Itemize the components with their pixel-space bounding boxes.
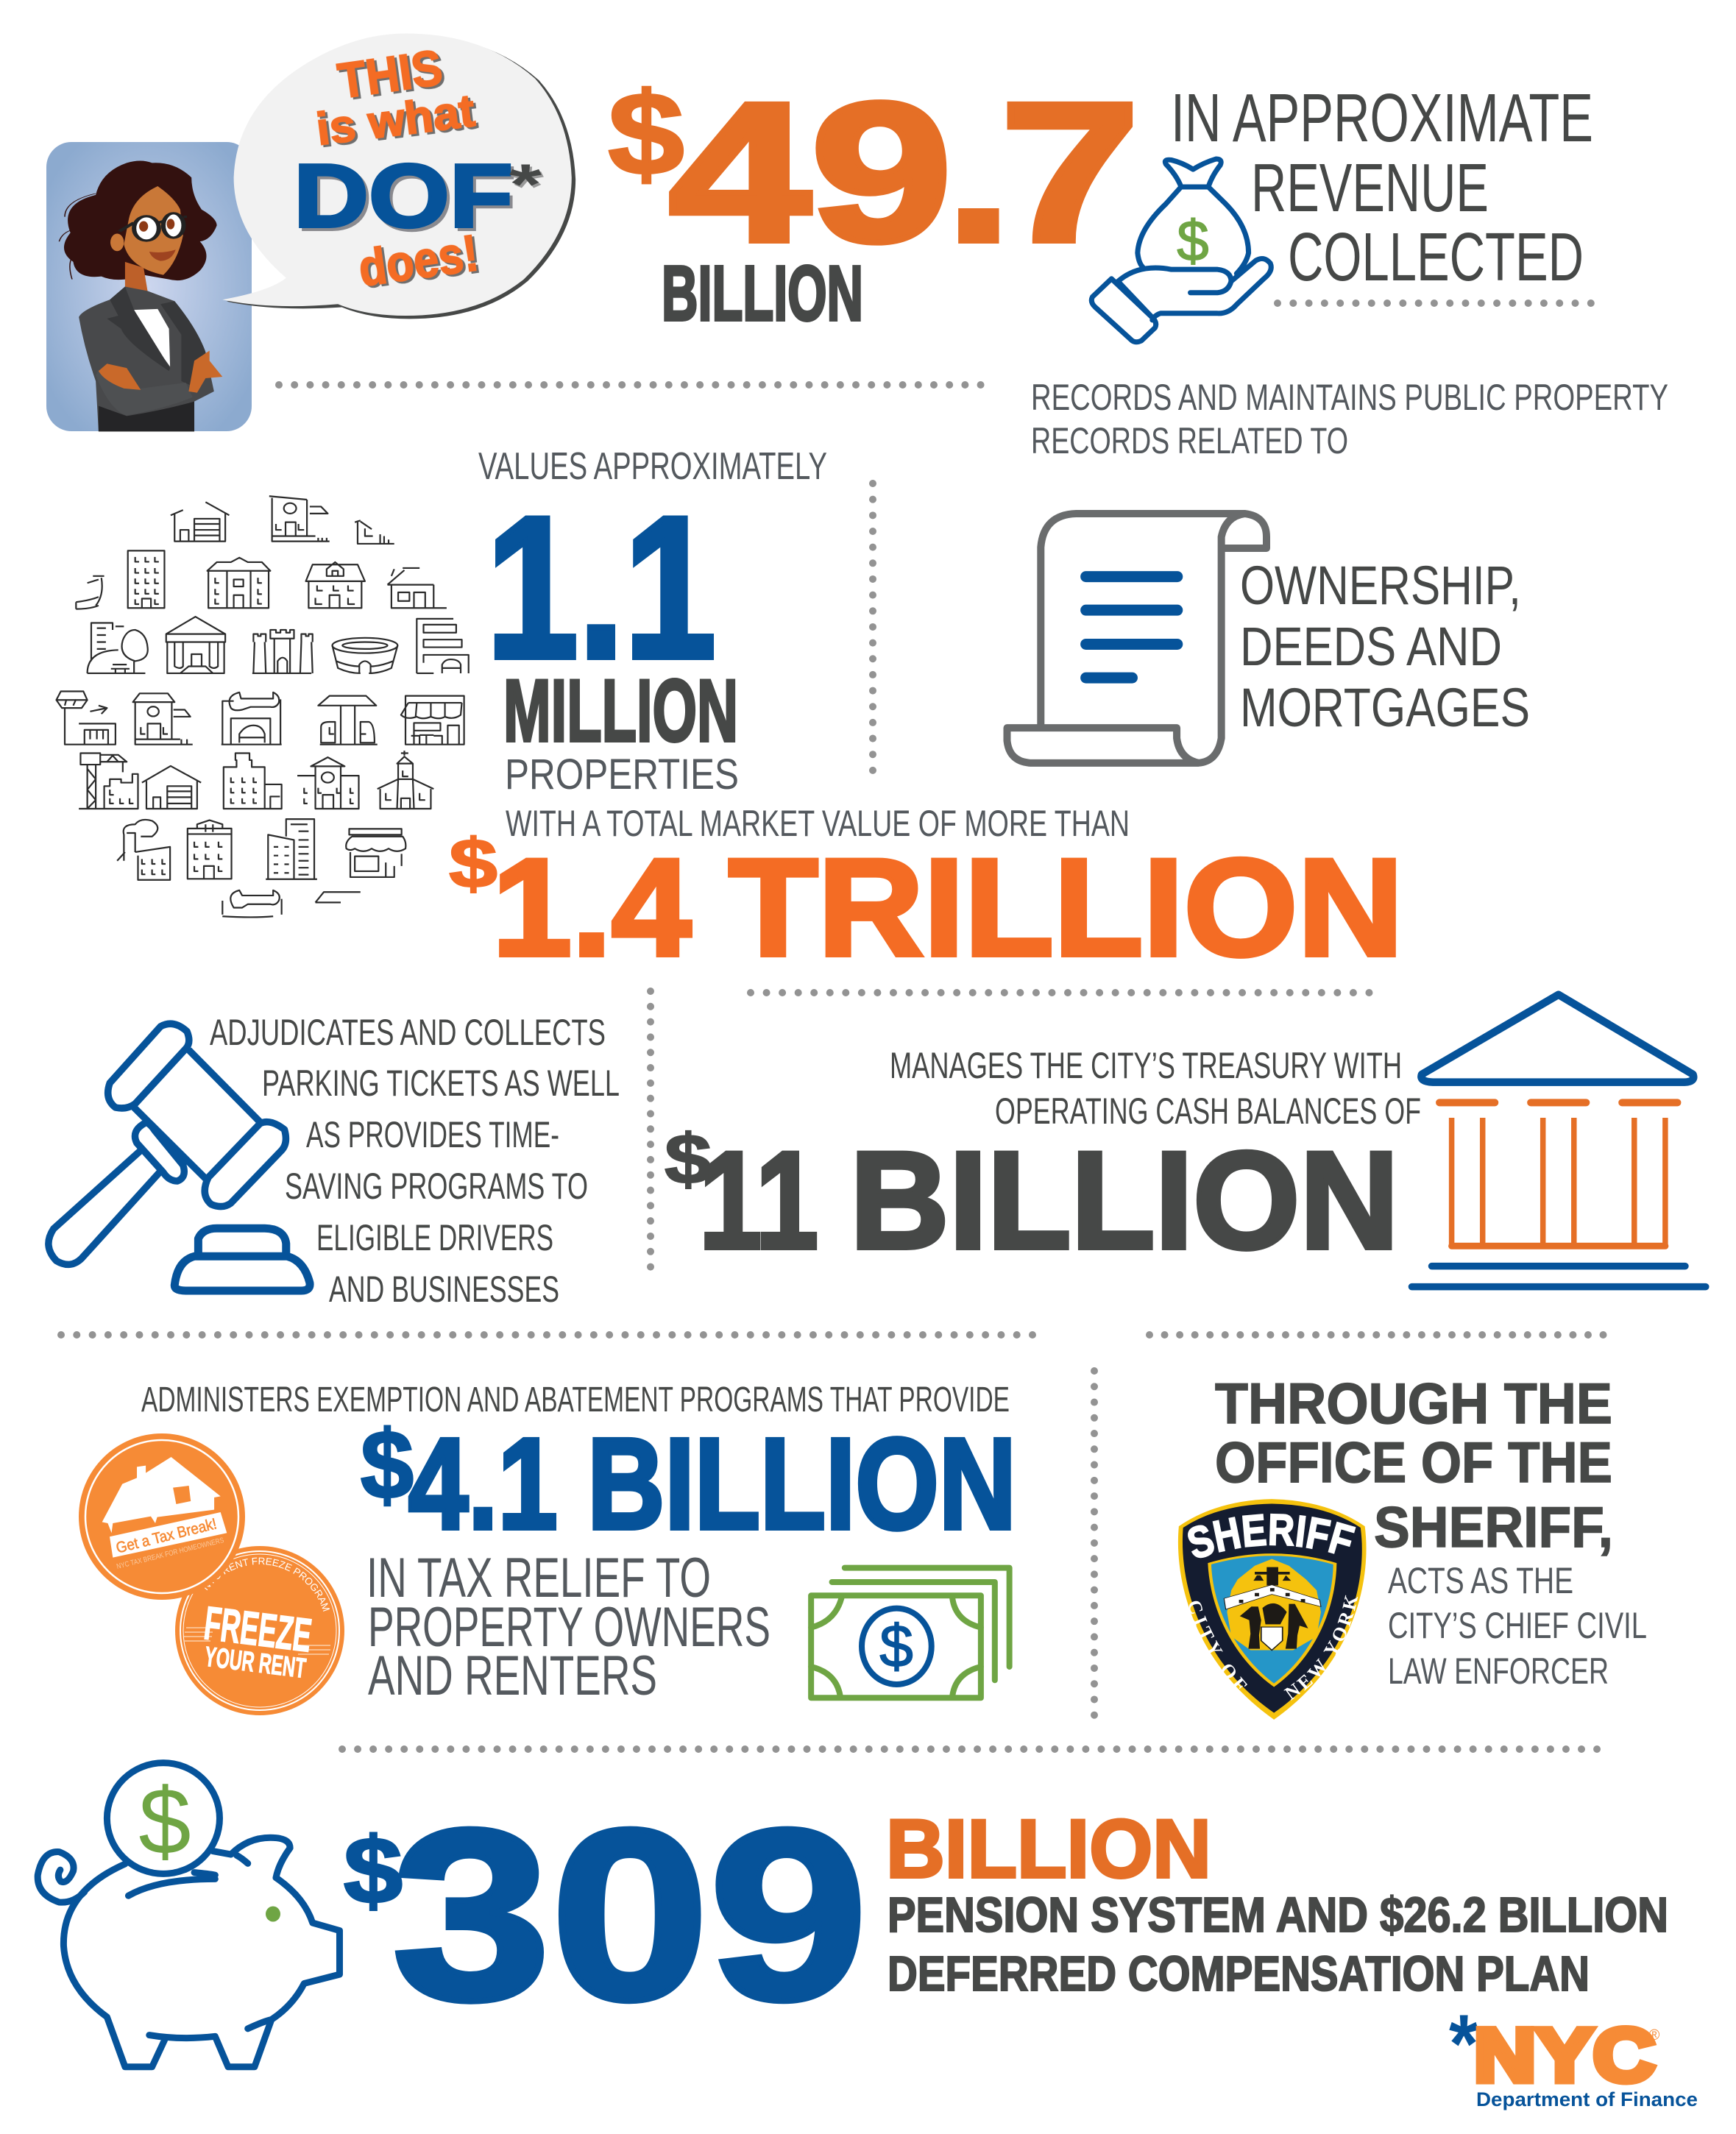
asterisk: * — [509, 152, 542, 216]
text: ownership deeds and mortgages: OWNERSHIP, — [1240, 555, 1521, 616]
word: trillion: TRILLION — [729, 830, 1403, 985]
text: in tax relief — [366, 1547, 770, 1707]
small label: NYC TAX BREAK FOR HOMEOWNERS — [116, 1536, 225, 1571]
illustration: DOF woman character — [59, 160, 222, 431]
arc label: city of: CITY OF — [1189, 1601, 1247, 1690]
figure 49.7 — [669, 62, 1140, 283]
dollar on money bag: $ — [1177, 208, 1209, 273]
dollar sign: $ — [361, 1411, 414, 1519]
unit: million: MILLION — [503, 662, 738, 760]
unit: billion: BILLION — [662, 250, 863, 337]
bubble shape — [222, 33, 575, 319]
registered mark: ® — [1649, 2027, 1660, 2043]
icon: document scroll — [1007, 514, 1266, 763]
panel: woman portrait card — [46, 142, 252, 431]
badge: sheriff shield — [1177, 1499, 1367, 1720]
text: adjudicates and collects parking tickets: AS PROVIDES TIME- — [306, 1114, 559, 1155]
icon: cash stack — [811, 1568, 1010, 1698]
badge: freeze your rent — [175, 1546, 344, 1715]
text: records and maintains: RECORDS RELATED TO — [1031, 420, 1348, 461]
dollar sign: $ — [665, 1120, 712, 1199]
text: adjudicates and collects parking tickets: AND BUSINESSES — [329, 1269, 559, 1310]
text: ownership deeds and mortgages: DEEDS AND — [1240, 616, 1502, 677]
text: records and maintains — [1031, 377, 1668, 461]
text: adjudicates and collects parking tickets: ELIGIBLE DRIVERS — [316, 1217, 553, 1258]
label: properties: PROPERTIES — [505, 751, 739, 798]
text: acts as the city's chief civil law enforcer — [1388, 1560, 1647, 1692]
house shape — [102, 1457, 227, 1558]
stat: 4.1 billion — [361, 1411, 1016, 1556]
icon: piggy bank with coin — [38, 1763, 339, 2067]
figure: 4.1 BILLION — [408, 1412, 1016, 1556]
dollar sign: $ — [608, 68, 684, 199]
text: in tax relief: AND RENTERS — [368, 1645, 657, 1707]
text: pension system and deferred compensation: DEFERRED COMPENSATION PLAN — [888, 1946, 1590, 2002]
text: through the office of the sheriff: THROUGH THE — [1215, 1371, 1612, 1436]
revenue stat — [608, 62, 1140, 337]
figure 11: 11 — [699, 1123, 818, 1277]
text: ownership deeds and mortgages: MORTGAGES — [1240, 677, 1530, 738]
logo: NYC Department of Finance — [1449, 1998, 1698, 2110]
text: acts as the city's chief civil law enforcer: LAW ENFORCER — [1388, 1651, 1609, 1692]
icon: treasury building — [1411, 995, 1706, 1287]
stat: 309 billion — [344, 1779, 1211, 2050]
slogan: is what: is what — [313, 85, 478, 155]
figure 49.7: 49 — [669, 62, 952, 283]
text: in tax relief: IN TAX RELIEF TO — [366, 1547, 711, 1609]
coin dollar: $ — [138, 1769, 191, 1874]
text: manages the city's treasury — [890, 1045, 1421, 1132]
slogan: THIS: THIS — [335, 39, 446, 110]
asterisk: * — [1449, 1998, 1478, 2090]
text: in approximate revenue collected: COLLECTED — [1288, 219, 1584, 295]
dollar on bill: $ — [879, 1613, 913, 1680]
slogan: does!: does! — [355, 224, 482, 297]
text: with a total market value: WITH A TOTAL MARKET VALUE OF MORE THAN — [506, 803, 1130, 844]
text: ownership deeds and mortgages — [1240, 555, 1530, 738]
arc label: NYC RENT FREEZE PROGRAM — [205, 1557, 330, 1612]
text: acts as the city's chief civil law enforcer: ACTS AS THE — [1388, 1560, 1573, 1601]
text: in approximate revenue collected — [1171, 79, 1593, 295]
speech bubble with slogan — [222, 33, 575, 319]
dollar sign: $ — [449, 825, 497, 903]
text: administers exemption: ADMINISTERS EXEMPTION AND ABATEMENT PROGRAMS THAT PROVIDE — [141, 1380, 1010, 1419]
text: acts as the city's chief civil law enforcer: CITY’S CHIEF CIVIL — [1388, 1605, 1647, 1646]
text: through the office of the sheriff: OFFICE OF THE — [1215, 1430, 1612, 1495]
text: in approximate revenue collected: IN APPROXIMATE — [1171, 79, 1593, 156]
figure 49.7: . — [946, 62, 1012, 283]
department name: Department of Finance — [1476, 2088, 1698, 2110]
arc label: new york: NEW YORK — [1283, 1595, 1358, 1701]
text: values approximately: VALUES APPROXIMATELY — [478, 445, 827, 488]
badge words: your rent: YOUR RENT — [203, 1642, 308, 1684]
icon: money bag in hand — [1091, 159, 1271, 342]
icon: gavel — [49, 1024, 310, 1291]
badge: get a tax break — [79, 1433, 245, 1600]
banner label: Get a Tax Break! — [114, 1515, 219, 1557]
arc label: sheriff: SHERIFF — [1188, 1513, 1356, 1559]
text: in approximate revenue collected: REVENUE — [1251, 149, 1489, 226]
text: pension system and deferred compensation — [888, 1887, 1668, 2002]
text: through the office of the sheriff — [1215, 1371, 1613, 1559]
text: adjudicates and collects parking tickets — [210, 1012, 620, 1310]
stat: 1.1 million properties — [486, 475, 739, 798]
stat: 1.4 trillion — [449, 825, 1403, 985]
figure 309: 309 — [392, 1779, 868, 2050]
text: in tax relief: PROPERTY OWNERS — [368, 1596, 770, 1659]
figure 1.1: 1.1 — [486, 475, 716, 701]
figure 49.7: 7 — [1000, 62, 1140, 283]
icon: city buildings cluster — [57, 496, 469, 917]
unit: billion: BILLION — [886, 1803, 1211, 1895]
text: manages the city's treasury: OPERATING CASH BALANCES OF — [995, 1091, 1421, 1132]
dollar sign: $ — [344, 1818, 403, 1924]
badge word: freeze: FREEZE — [202, 1596, 314, 1662]
NYC wordmark: NYC — [1474, 2013, 1655, 2097]
slogan: DOF: DOF — [294, 146, 513, 246]
word: billion: BILLION — [850, 1123, 1399, 1277]
text: adjudicates and collects parking tickets: ADJUDICATES AND COLLECTS — [210, 1012, 606, 1053]
text: through the office of the sheriff: SHERIFF, — [1374, 1495, 1613, 1559]
stat: 11 billion — [665, 1120, 1399, 1277]
text: adjudicates and collects parking tickets: SAVING PROGRAMS TO — [285, 1166, 588, 1207]
figure 1.4: 1.4 — [492, 830, 691, 985]
text: manages the city's treasury: MANAGES THE CITY’S TREASURY WITH — [890, 1045, 1402, 1086]
text: adjudicates and collects parking tickets: PARKING TICKETS AS WELL — [262, 1063, 620, 1104]
pig eye — [266, 1906, 280, 1922]
